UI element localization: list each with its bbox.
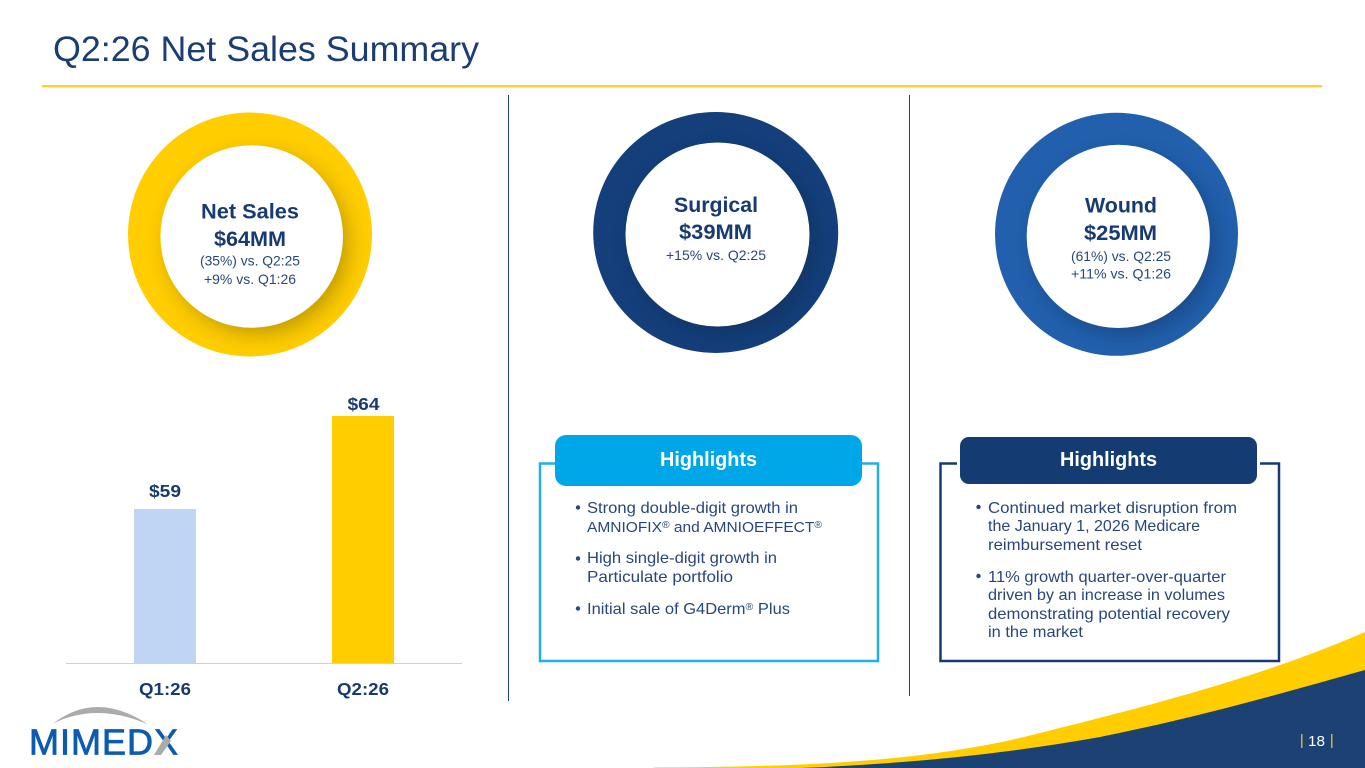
surgical bullet list: ® [662, 520, 670, 531]
surgical bullet list [576, 500, 823, 618]
surgical bullet list: and AMNIOEFFECT [670, 519, 814, 536]
bar: Q1:26 [134, 509, 196, 663]
logo: MIMEDX: MIMEDX [29, 722, 178, 762]
surgical bullet list: Plus [753, 601, 790, 618]
bar chart [66, 394, 462, 699]
panel: surgical ring [593, 112, 838, 353]
page number: 18 [1308, 733, 1325, 750]
wound label: Wound [1085, 194, 1157, 218]
panel: wound ring [995, 113, 1238, 356]
wound comparison: (61%) vs. Q2:25 [1071, 248, 1171, 264]
surgical bullet list: Particulate portfolio [587, 569, 733, 586]
surgical highlights header [555, 435, 862, 486]
wound bullet list [976, 500, 1237, 641]
bar: Q2:26 [332, 416, 394, 663]
wound value: $25MM [1084, 222, 1157, 245]
surgical bullet list: Strong double-digit growth in [587, 500, 798, 517]
axis label: Q1:26: Q1:26 [139, 679, 191, 699]
surgical bullet list: ® [814, 520, 823, 531]
wound bullet list: the January 1, 2026 Medicare [988, 518, 1200, 535]
panel: net sales ring [128, 112, 372, 356]
surgical value: $39MM [679, 221, 752, 244]
panel: wound highlights [940, 437, 1279, 661]
wound bullet list: reimbursement reset [988, 537, 1143, 554]
surgical bullet list: High single-digit growth in [587, 550, 777, 567]
value: $59: $59 [149, 481, 181, 501]
axis label: Q2:26: Q2:26 [337, 679, 389, 699]
wound highlights header [960, 437, 1257, 484]
surgical highlights header: Highlights [660, 449, 757, 471]
surgical bullet list: AMNIOFIX [587, 519, 660, 536]
page number [1301, 733, 1332, 750]
wound highlights header: Highlights [1060, 449, 1157, 471]
wound bullet list: demonstrating potential recovery [988, 606, 1230, 623]
wound bullet list: in the market [988, 624, 1084, 641]
wound bullet list: Continued market disruption from [988, 500, 1237, 517]
surgical bullet list: Initial sale of G4Derm [587, 601, 737, 618]
net sales value: $64MM [214, 228, 286, 251]
net sales label: Net Sales [201, 200, 299, 224]
wound bullet list: driven by an increase in volumes [988, 587, 1225, 604]
wound sequential: +11% vs. Q1:26 [1071, 266, 1171, 282]
net sales sequential: +9% vs. Q1:26 [204, 271, 296, 287]
wound bullet list: 11% growth quarter-over-quarter [988, 569, 1226, 586]
footer swoosh [654, 632, 1365, 768]
surgical bullet list: ® [746, 602, 754, 613]
value: $64: $64 [348, 394, 380, 414]
title: Q2:26 Net Sales Summary [53, 30, 480, 69]
net sales comparison: (35%) vs. Q2:25 [200, 252, 300, 268]
panel: surgical highlights [540, 435, 878, 661]
surgical label: Surgical [674, 194, 758, 217]
surgical comparison: +15% vs. Q2:25 [666, 247, 766, 263]
